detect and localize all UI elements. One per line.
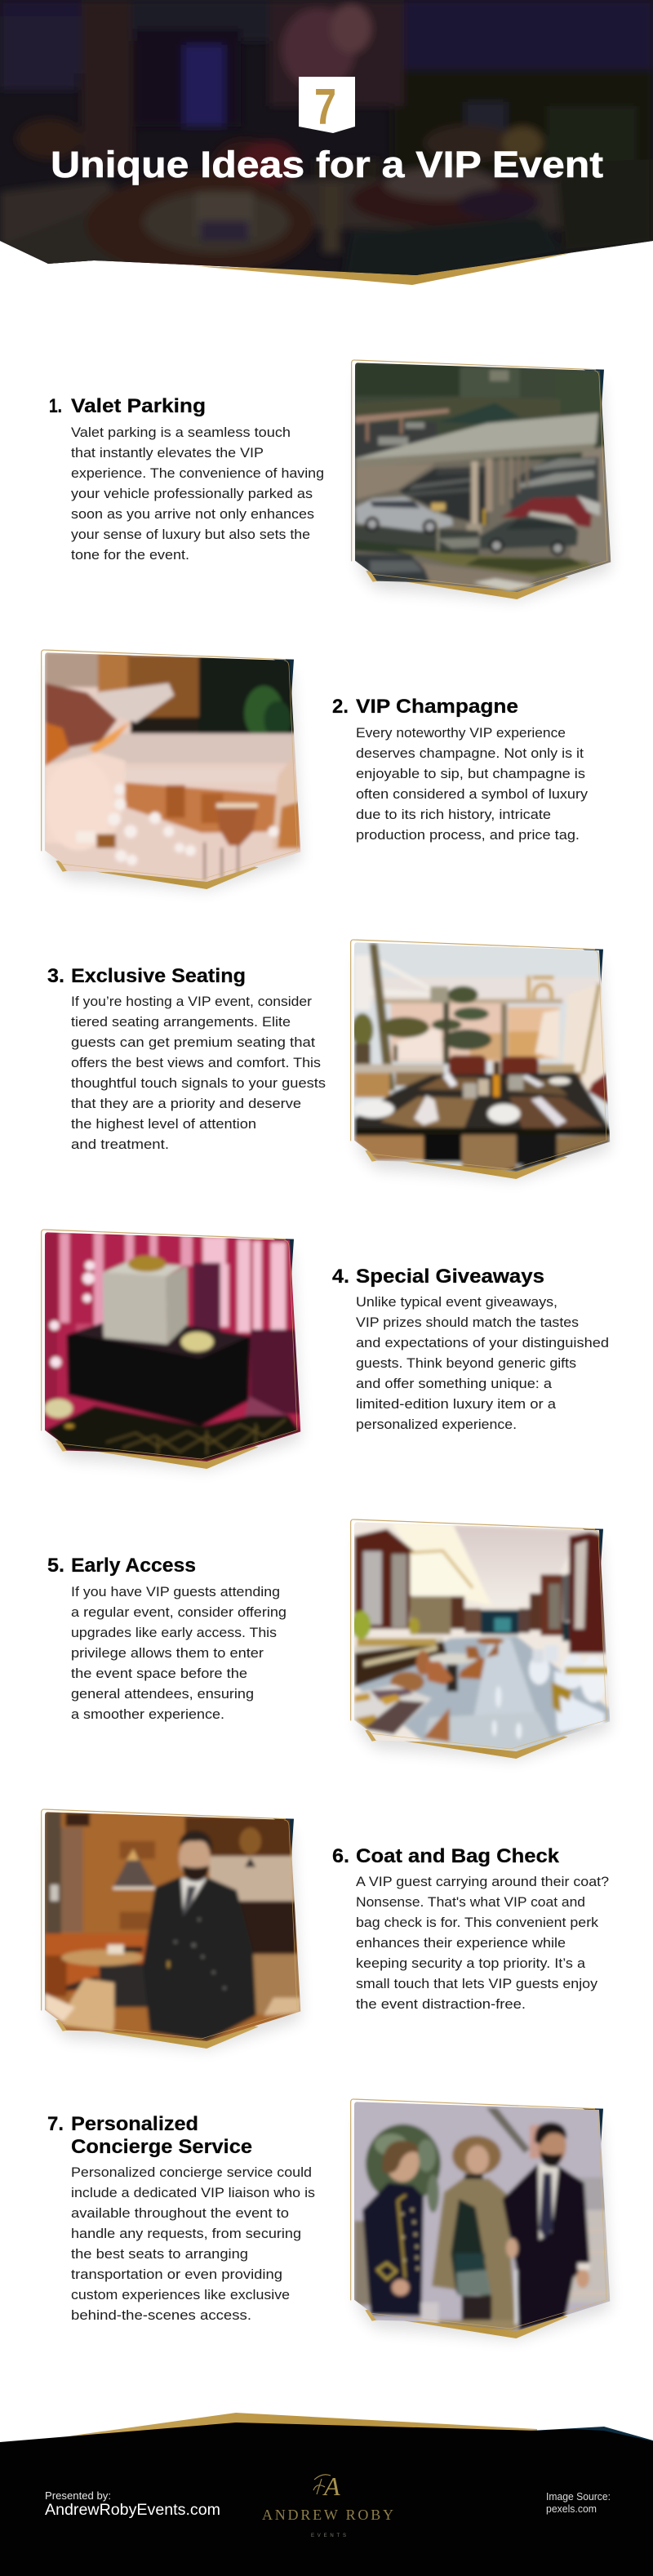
body 1: your vehicle professionally parked as — [71, 487, 313, 501]
body 3: If you’re hosting a VIP event, consider — [71, 994, 313, 1009]
heading 7 — [47, 2113, 252, 2158]
body 6 — [356, 1875, 609, 2012]
photo 5: restaurant hall — [342, 1510, 620, 1764]
body 2: enjoyable to sip, but champagne is — [356, 767, 585, 781]
body 7 — [71, 2165, 315, 2323]
monogram: A — [322, 2471, 340, 2501]
body 5: the event space before the — [71, 1666, 247, 1681]
body 7: available throughout the event to — [71, 2206, 289, 2221]
body 5: If you have VIP guests attending — [71, 1585, 280, 1599]
body 7: behind-the-scenes access. — [71, 2308, 251, 2323]
presented by — [45, 2489, 220, 2519]
body 1: Valet parking is a seamless touch — [71, 425, 291, 440]
body 5: a smoother experience. — [71, 1707, 224, 1722]
footer teal accent — [531, 2427, 653, 2445]
photo 2: champagne glasses — [33, 641, 310, 894]
body 7: Personalized concierge service could — [71, 2165, 312, 2180]
body 1 — [71, 425, 324, 563]
photo 6: man in suit — [33, 1800, 310, 2053]
heading 2: VIP Champagne — [356, 696, 518, 718]
heading 7: 7. — [47, 2113, 64, 2135]
panel: 7 personalized concierge text — [47, 2113, 315, 2323]
body 6: small touch that lets VIP guests enjoy — [356, 1977, 598, 1991]
heading 7: Personalized — [71, 2113, 198, 2135]
body 2: deserves champagne. Not only is it — [356, 746, 584, 761]
panel: 2 vip champagne text — [332, 696, 589, 843]
heading 7: Concierge Service — [71, 2136, 252, 2158]
body 4: and offer something unique: a — [356, 1377, 553, 1391]
body 6: bag check is for. This convenient perk — [356, 1915, 599, 1930]
presented by: Presented by: — [45, 2489, 111, 2502]
image source: Image Source: — [546, 2491, 611, 2503]
number badge: 7 — [314, 79, 336, 136]
body 3: the highest level of attention — [71, 1117, 256, 1132]
body 1: soon as you arrive not only enhances — [71, 507, 314, 522]
body 2 — [356, 726, 589, 843]
body 2: production process, and price tag. — [356, 828, 580, 843]
image source — [546, 2491, 611, 2515]
body 7: handle any requests, from securing — [71, 2227, 301, 2241]
logo: Andrew Roby Events — [262, 2471, 393, 2538]
body 4: VIP prizes should match the tastes — [356, 1315, 579, 1330]
body 6: the event distraction-free. — [356, 1997, 526, 2012]
body 6: enhances their experience while — [356, 1936, 566, 1951]
body 5: a regular event, consider offering — [71, 1605, 287, 1620]
body 3: and treatment. — [71, 1137, 169, 1152]
body 3: guests can get premium seating that — [71, 1035, 315, 1050]
body 6: keeping security a top priority. It’s a — [356, 1956, 586, 1971]
panel: 6 coat and bag check text — [332, 1845, 609, 2012]
heading 1: Valet Parking — [71, 395, 206, 417]
heading 6: Coat and Bag Check — [356, 1845, 559, 1867]
number badge — [299, 77, 355, 136]
logo: Andrew Roby Events: EVENTS — [311, 2534, 346, 2538]
heading 3: Exclusive Seating — [71, 965, 246, 987]
body 1: that instantly elevates the VIP — [71, 446, 264, 460]
presented by: AndrewRobyEvents.com — [45, 2502, 220, 2519]
body 4: and expectations of your distinguished — [356, 1336, 609, 1350]
photo 3: rooftop dining table — [342, 931, 620, 1184]
header teal accent — [31, 253, 94, 264]
heading 3: 3. — [47, 965, 64, 987]
body 7: transportation or even providing — [71, 2267, 282, 2282]
body 2: due to its rich history, intricate — [356, 808, 551, 822]
panel: 5 early access text — [47, 1555, 287, 1722]
panel: 4 special giveaways text — [332, 1266, 609, 1432]
body 5: privilege allows them to enter — [71, 1646, 264, 1661]
body 1: your sense of luxury but also sets the — [71, 527, 310, 542]
footer gold accent — [67, 2413, 537, 2436]
body 6: Nonsense. That's what VIP coat and — [356, 1895, 585, 1910]
body 6: A VIP guest carrying around their coat? — [356, 1875, 609, 1889]
heading 5: 5. — [47, 1555, 64, 1577]
body 5 — [71, 1585, 287, 1722]
body 2: often considered a symbol of luxury — [356, 787, 589, 802]
body 5: upgrades like early access. This — [71, 1626, 277, 1640]
body 3: tiered seating arrangements. Elite — [71, 1015, 291, 1030]
body 1: tone for the event. — [71, 548, 189, 563]
body 3: thoughtful touch signals to your guests — [71, 1076, 326, 1091]
body 7: the best seats to arranging — [71, 2247, 248, 2262]
heading 6: 6. — [332, 1845, 349, 1867]
panel: footer — [0, 2413, 653, 2576]
heading 2: 2. — [332, 696, 349, 718]
body 4: limited-edition luxury item or a — [356, 1397, 557, 1412]
body 4 — [356, 1295, 609, 1432]
body 1: experience. The convenience of having — [71, 466, 324, 481]
body 2: Every noteworthy VIP experience — [356, 726, 566, 741]
body 4: Unlike typical event giveaways, — [356, 1295, 557, 1310]
title: Unique Ideas for a VIP Event — [51, 144, 603, 185]
heading 1: 1. — [49, 395, 62, 417]
body 5: general attendees, ensuring — [71, 1687, 254, 1702]
heading 4: Special Giveaways — [356, 1266, 544, 1288]
body 4: personalized experience. — [356, 1417, 517, 1432]
heading 5: Early Access — [71, 1555, 196, 1577]
photo 4: gift boxes — [33, 1221, 310, 1474]
heading 4: 4. — [332, 1266, 349, 1288]
panel: header — [0, 0, 653, 285]
header gold accent — [196, 253, 571, 285]
logo: Andrew Roby Events: ANDREW ROBY — [262, 2507, 393, 2523]
panel: 3 exclusive seating text — [47, 965, 326, 1152]
footer background — [0, 2423, 653, 2576]
photo 7: three guests — [342, 2090, 620, 2343]
monogram — [313, 2471, 340, 2501]
body 7: custom experiences like exclusive — [71, 2288, 290, 2302]
body 3 — [71, 994, 326, 1152]
image source: pexels.com — [546, 2503, 597, 2515]
body 7: include a dedicated VIP liaison who is — [71, 2186, 315, 2200]
panel: 1 valet parking text — [49, 395, 324, 563]
photo 1: parking lot — [343, 351, 620, 604]
body 3: that they are a priority and deserve — [71, 1097, 301, 1111]
body 4: guests. Think beyond generic gifts — [356, 1356, 576, 1371]
header photo: banquet table — [0, 0, 653, 282]
body 3: offers the best views and comfort. This — [71, 1056, 321, 1070]
